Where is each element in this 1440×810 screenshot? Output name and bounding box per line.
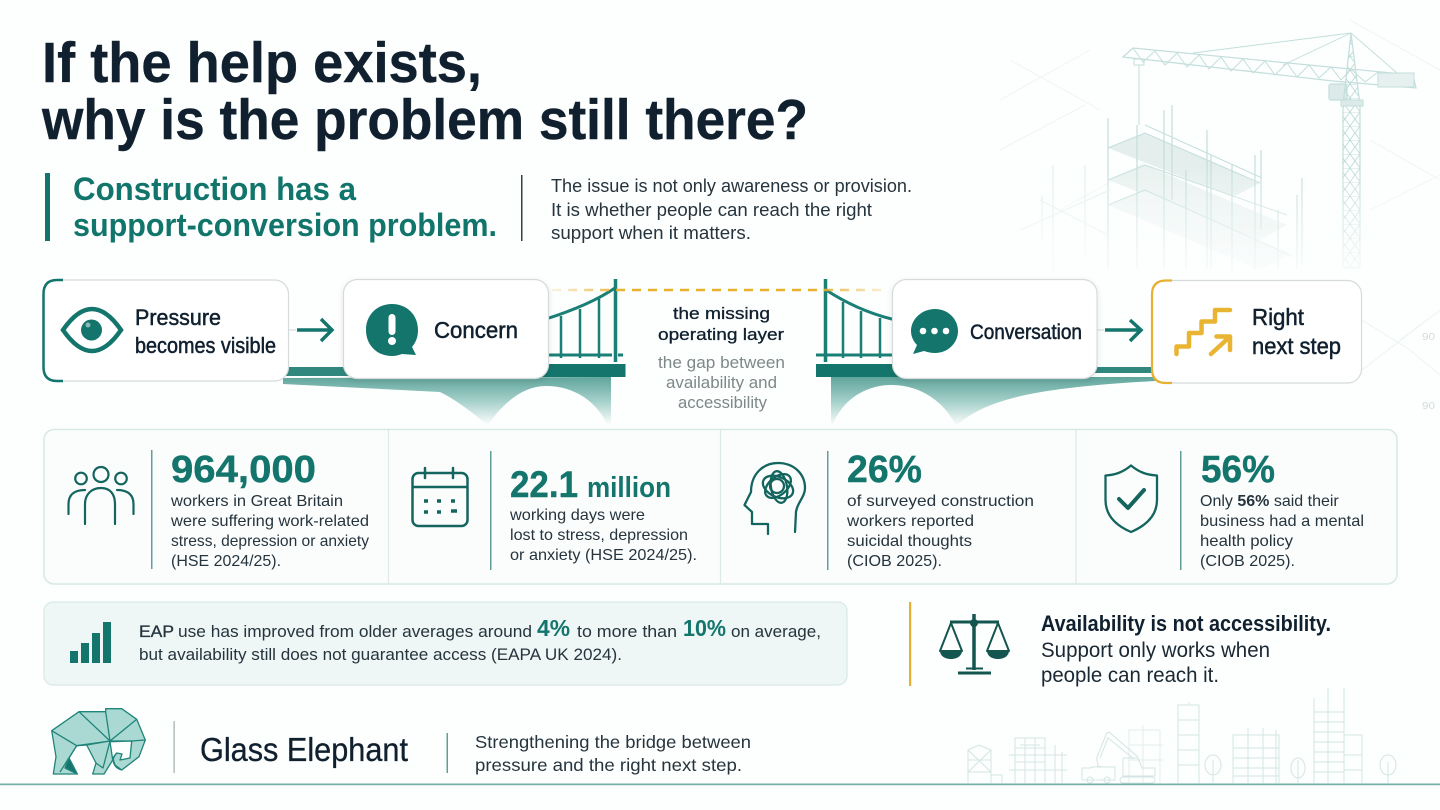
logo: glass elephant — [52, 709, 145, 774]
bridge: missing dashed span — [552, 289, 888, 291]
stat: 56% mental health policy: health policy — [1200, 533, 1293, 550]
stat: 56% mental health policy — [1106, 449, 1364, 570]
stat: 26% suicidal thoughts: of surveyed construction — [847, 493, 1034, 510]
icon: shield with check — [1106, 466, 1157, 532]
step card: conversation: Conversation — [970, 321, 1082, 344]
icon: scales — [940, 614, 1009, 673]
stat: 22.1 million days: 22.1 — [510, 464, 578, 505]
centre label: the missing operating layer: availability and — [666, 374, 777, 392]
panel: EAP use callout — [44, 602, 847, 685]
stat: 22.1 million days — [412, 451, 697, 570]
stat: 964,000 workers: (HSE 2024/25). — [171, 553, 281, 570]
bridge: decks — [285, 367, 355, 376]
stat: 22.1 million days: lost to stress, depression — [510, 527, 688, 544]
stat: 56% mental health policy: business had a mental — [1200, 513, 1364, 530]
stat: 964,000 workers: 964,000 — [171, 449, 316, 491]
stat: 26% suicidal thoughts: workers reported — [846, 513, 974, 530]
bridge: right tower and cables — [816, 279, 896, 362]
tagline — [446, 732, 751, 775]
icon: stairs and arrow — [1176, 310, 1230, 354]
callout: availability is not accessibility: Availability is not accessibility. — [1041, 611, 1331, 636]
panel: EAP use callout: but availability still does not guarantee access (EAPA UK 2024). — [139, 646, 622, 664]
arrow: conversation to right next step — [1097, 320, 1141, 341]
stat: 964,000 workers — [68, 449, 369, 570]
bridge: left tower and cables — [546, 279, 623, 362]
stat: 26% suicidal thoughts: 26% — [847, 449, 922, 491]
intro text — [521, 175, 912, 243]
step card: conversation — [892, 280, 1097, 378]
step card: right next step: next step — [1252, 333, 1341, 359]
stat: 964,000 workers: stress, depression or anxiety — [171, 533, 369, 550]
stat: 56% mental health policy: 56% — [1201, 449, 1275, 491]
stat: 22.1 million days: working days were — [509, 507, 645, 524]
centre label: the missing operating layer: accessibility — [678, 394, 768, 412]
step card: pressure becomes visible: becomes visible — [135, 333, 276, 358]
bridge illustration — [283, 279, 1160, 426]
title — [41, 31, 808, 152]
stat: 26% suicidal thoughts — [744, 449, 1034, 570]
panel: EAP use callout: to more than — [577, 623, 677, 641]
subheading: support-conversion problem: Construction has a — [73, 171, 356, 207]
step card: right next step — [1152, 280, 1362, 383]
background: blueprint marks at right: 90 — [1422, 332, 1436, 343]
stat: 26% suicidal thoughts: (CIOB 2025). — [847, 553, 942, 570]
centre label: the missing operating layer: the missing — [673, 304, 770, 323]
panel: EAP use callout: use has improved from older averages around — [178, 623, 532, 641]
stat: 22.1 million days: or anxiety (HSE 2024/25). — [510, 547, 697, 564]
intro text: support when it matters. — [551, 222, 751, 243]
panel: EAP use callout: EAP — [139, 623, 174, 641]
stat: 26% suicidal thoughts: suicidal thoughts — [847, 533, 972, 550]
step card: concern — [344, 280, 548, 378]
icon: people — [68, 467, 134, 524]
stat: 964,000 workers: workers in Great Britain — [170, 493, 343, 510]
panel: key statistics — [44, 430, 1397, 584]
bridge: right pier and arch — [831, 377, 1155, 426]
bridge: left pier and arch — [283, 377, 611, 425]
title: why is the problem still there? — [41, 88, 808, 152]
panel: EAP use callout: 10% — [683, 615, 726, 641]
centre label: the missing operating layer — [658, 304, 785, 412]
icon: eye — [63, 309, 121, 351]
background: blueprint marks at right: 90 — [1422, 401, 1436, 412]
stat: 56% mental health policy: Only 56% said their — [1200, 493, 1339, 510]
icon: chat bubble — [911, 309, 958, 354]
background: construction crane and scaffold — [1000, 20, 1440, 268]
footer: construction skyline — [968, 688, 1396, 783]
subheading: support-conversion problem — [45, 171, 497, 243]
icon: alert speech bubble — [366, 304, 418, 356]
stat: 56% mental health policy: (CIOB 2025). — [1200, 553, 1295, 570]
title: If the help exists, — [42, 31, 482, 95]
step card: pressure becomes visible: Pressure — [135, 305, 221, 330]
callout: availability is not accessibility: people can reach it. — [1041, 664, 1219, 687]
centre label: the missing operating layer: operating layer — [658, 325, 784, 344]
panel: EAP use callout: on average, — [731, 623, 821, 641]
footer rule — [0, 784, 1440, 785]
step card: pressure becomes visible — [44, 280, 288, 381]
callout: availability is not accessibility: Support only works when — [1041, 639, 1270, 662]
background: blueprint marks at right — [1362, 310, 1440, 412]
panel: EAP use callout: 4% — [537, 615, 570, 641]
stat: 22.1 million days: million — [587, 472, 671, 504]
arrow: pressure to concern — [289, 319, 332, 341]
tagline: pressure and the right next step. — [475, 755, 742, 775]
brand name: Glass Elephant — [200, 731, 408, 768]
icon: bar chart — [70, 622, 111, 663]
intro text: The issue is not only awareness or provision. — [551, 175, 912, 196]
icon: head with tangled thoughts — [744, 463, 805, 534]
stat: 964,000 workers: were suffering work-related — [170, 513, 369, 530]
tagline: Strengthening the bridge between — [475, 732, 751, 752]
icon: calendar — [412, 468, 468, 526]
callout: availability is not accessibility — [909, 602, 1331, 687]
centre label: the missing operating layer: the gap between — [658, 354, 785, 372]
intro text: It is whether people can reach the right — [551, 199, 872, 220]
step card: right next step: Right — [1252, 304, 1305, 330]
step card: concern: Concern — [434, 317, 518, 343]
subheading: support-conversion problem: support-conversion problem. — [73, 207, 497, 243]
